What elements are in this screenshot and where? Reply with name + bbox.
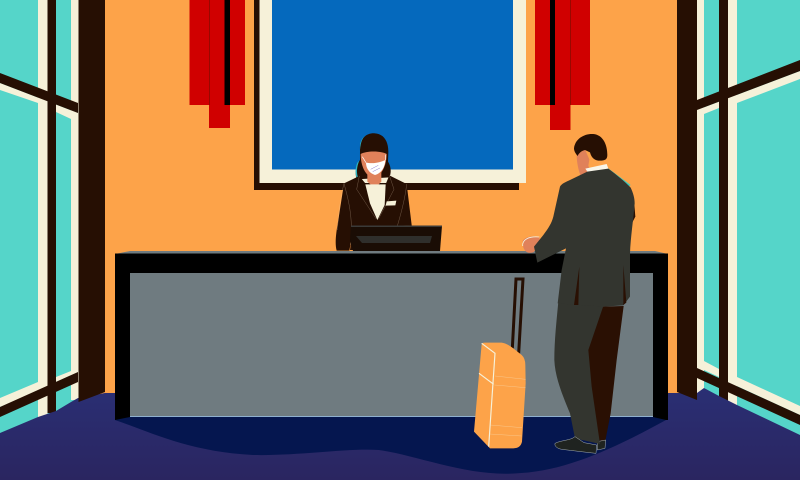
reception desk	[115, 251, 668, 420]
guest jacket	[534, 169, 635, 307]
guest jacket lining	[625, 200, 635, 237]
guest shirt collar	[585, 164, 609, 173]
receptionist pocket square	[386, 201, 396, 206]
carpet floor	[0, 388, 800, 480]
guest rear shoe	[597, 440, 606, 450]
floor shadow under desk	[115, 417, 666, 474]
suitcase handle	[512, 279, 523, 353]
guest rear leg	[587, 306, 624, 441]
guest front leg	[554, 302, 603, 444]
male guest	[523, 134, 635, 453]
suitcase lines	[479, 343, 495, 447]
suitcase	[474, 279, 526, 448]
guest front shoe	[555, 437, 597, 453]
guest jacket shoulder highlight	[607, 168, 631, 187]
surgical mask	[362, 155, 385, 175]
receptionist lapel lines	[337, 175, 407, 245]
suitcase body	[474, 343, 526, 448]
receptionist jacket	[336, 175, 412, 251]
receptionist face	[361, 151, 387, 177]
receptionist wearing a mask	[336, 133, 413, 251]
orange wall	[100, 0, 700, 400]
left pillar	[78, 0, 105, 402]
receptionist blouse	[365, 184, 386, 220]
right red curtain	[535, 0, 590, 130]
guest hand	[523, 236, 540, 253]
blue framed picture	[254, 0, 526, 190]
guest hair	[574, 134, 607, 161]
right pillar	[677, 0, 697, 400]
guest neck	[577, 149, 591, 176]
guest jacket vents	[574, 265, 626, 305]
right window	[695, 0, 800, 440]
left red curtain	[190, 0, 245, 128]
receptionist hair	[356, 133, 391, 179]
reception monitor	[350, 226, 442, 251]
left window	[0, 0, 80, 440]
